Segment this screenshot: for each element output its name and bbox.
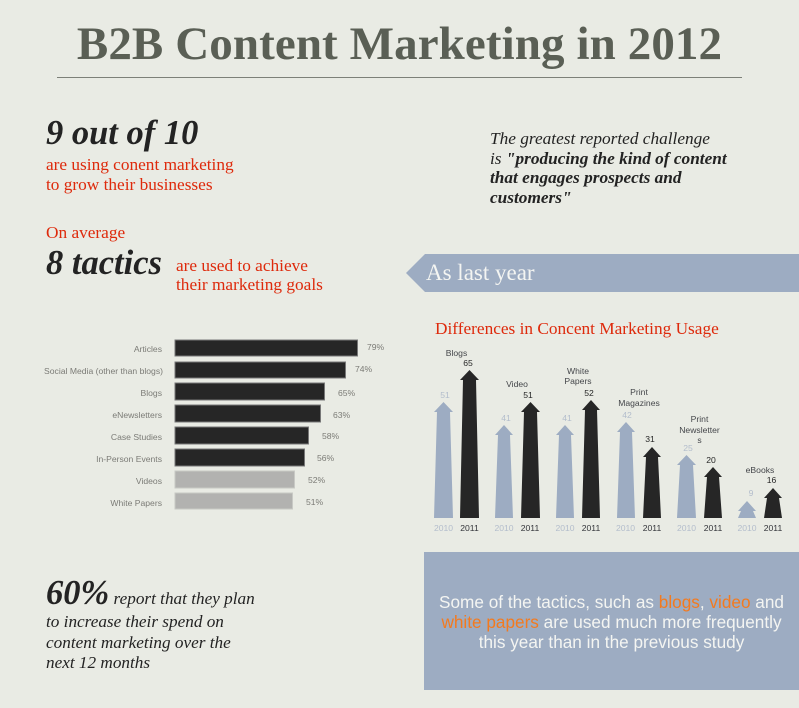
group: Blogs: 65 bbox=[463, 358, 473, 368]
group: Video: 2011 bbox=[521, 523, 539, 533]
bar: Case Studies bbox=[111, 427, 340, 444]
group: Print Newsletters: 2010 bbox=[677, 523, 696, 533]
bar: White Papers: White Papers bbox=[110, 498, 162, 508]
group: Print Magazines: 31 bbox=[645, 434, 655, 444]
callout text: this year than in the previous study bbox=[479, 632, 744, 652]
bar: eNewsletters: 63% bbox=[333, 410, 351, 420]
bar: Social Media: Social Media (other than blogs) bbox=[44, 366, 163, 376]
title: B2B Content Marketing in 2012 bbox=[77, 18, 722, 70]
group: White Papers: 52 bbox=[584, 388, 594, 398]
bar: Articles: Articles bbox=[134, 344, 162, 354]
bar: Articles bbox=[134, 340, 385, 356]
banner text: As last year bbox=[426, 260, 535, 285]
stat continuation: next 12 months bbox=[46, 653, 150, 672]
title underline bbox=[57, 77, 742, 78]
group: Print Newsletters: 20 bbox=[706, 455, 716, 465]
bar: Case Studies: 58% bbox=[322, 431, 340, 441]
group: Print Magazines: 2010 bbox=[616, 523, 635, 533]
callout text bbox=[439, 592, 784, 652]
group: Blogs: Blogs bbox=[446, 348, 467, 358]
group: Print Magazines: Magazines bbox=[618, 398, 660, 408]
group: Print Magazines bbox=[616, 387, 661, 533]
stat continuation: content marketing over the bbox=[46, 633, 231, 652]
stat continuation bbox=[46, 612, 231, 672]
group: eBooks: 9 bbox=[749, 488, 754, 498]
group: Print Newsletters: 25 bbox=[683, 443, 693, 453]
group: White Papers: 2010 bbox=[555, 523, 575, 533]
group: White Papers: 41 bbox=[562, 413, 572, 423]
group: Print Newsletters bbox=[677, 414, 722, 533]
group: eBooks bbox=[737, 465, 782, 533]
banner: as last year bbox=[406, 254, 799, 292]
group: White Papers bbox=[555, 366, 600, 533]
arrow chart: usage differences bbox=[434, 348, 782, 533]
group: Video bbox=[494, 379, 540, 533]
bar: Case Studies: Case Studies bbox=[111, 432, 162, 442]
quote: greatest challenge: that engages prospects and bbox=[490, 168, 682, 187]
tactics description: their marketing goals bbox=[176, 275, 323, 294]
stat: 9 out of 10 bbox=[46, 114, 234, 194]
bar: Videos bbox=[136, 471, 326, 488]
group: eBooks: 2010 bbox=[737, 523, 757, 533]
bar: Articles: 79% bbox=[367, 342, 385, 352]
bar: Social Media: 74% bbox=[355, 364, 373, 374]
tactics description: are used to achieve bbox=[176, 256, 308, 275]
bar: Blogs: 65% bbox=[338, 388, 356, 398]
group: Print Newsletters: s bbox=[697, 435, 702, 445]
callout text: white papers are used much more frequently bbox=[441, 612, 782, 632]
group: Blogs: 2011 bbox=[460, 523, 479, 533]
bar: Videos: 52% bbox=[308, 475, 326, 485]
on average: On average bbox=[46, 223, 125, 242]
quote: greatest challenge bbox=[490, 129, 728, 207]
bar: Social Media bbox=[44, 362, 373, 378]
group: White Papers: Papers bbox=[564, 376, 592, 386]
group: Blogs: 2010 bbox=[434, 523, 453, 533]
group: White Papers: White bbox=[567, 366, 589, 376]
stat number: 9 out of 10 bbox=[46, 114, 198, 152]
group: Video: Video bbox=[506, 379, 528, 389]
chart title: Differences in Concent Marketing Usage bbox=[435, 319, 719, 338]
bar: In-Person Events bbox=[96, 449, 335, 466]
stat description: to grow their businesses bbox=[46, 175, 213, 194]
bar: Blogs bbox=[140, 383, 356, 400]
quote: greatest challenge: The greatest reported challenge bbox=[490, 129, 710, 148]
bar: White Papers: 51% bbox=[306, 497, 324, 507]
bar chart: tactics bbox=[44, 340, 385, 510]
bar: Videos: Videos bbox=[136, 476, 162, 486]
bar: In-Person Events: In-Person Events bbox=[96, 454, 162, 464]
group: Print Newsletters: Print bbox=[691, 414, 709, 424]
group: White Papers: 2011 bbox=[582, 523, 600, 533]
bar: eNewsletters: eNewsletters bbox=[112, 410, 162, 420]
group: Video: 2010 bbox=[494, 523, 514, 533]
callout panel bbox=[424, 552, 799, 690]
bar: eNewsletters bbox=[112, 405, 351, 422]
banner shape bbox=[406, 254, 799, 292]
group: Blogs: 51 bbox=[440, 390, 450, 400]
stat description: are using conent marketing bbox=[46, 155, 234, 174]
group: Blogs bbox=[434, 348, 479, 533]
bar: White Papers bbox=[110, 493, 324, 509]
bar: In-Person Events: 56% bbox=[317, 453, 335, 463]
stat continuation: to increase their spend on bbox=[46, 612, 224, 631]
stat lead line: 60% report that they plan bbox=[46, 574, 255, 612]
quote: greatest challenge: is "producing the kind of content bbox=[490, 149, 727, 168]
callout text: Some of the tactics, such as blogs, video and bbox=[439, 592, 784, 612]
tactics description bbox=[176, 256, 323, 294]
tactics number: 8 tactics bbox=[46, 244, 162, 282]
group: Print Newsletters: 2011 bbox=[704, 523, 722, 533]
stat: 8 tactics bbox=[46, 223, 323, 294]
group: Print Magazines: Print bbox=[630, 387, 648, 397]
group: eBooks: 16 bbox=[767, 475, 776, 485]
bar: Blogs: Blogs bbox=[140, 388, 162, 398]
group: eBooks: eBooks bbox=[746, 465, 774, 475]
group: Print Magazines: 42 bbox=[622, 410, 632, 420]
group: Print Magazines: 2011 bbox=[643, 523, 661, 533]
group: Video: 51 bbox=[523, 390, 533, 400]
stat: 60% spend bbox=[46, 574, 255, 672]
group: Video: 41 bbox=[501, 413, 511, 423]
quote: greatest challenge: customers" bbox=[490, 188, 572, 207]
group: eBooks: 2011 bbox=[764, 523, 782, 533]
stat description bbox=[46, 155, 234, 194]
group: Print Newsletters: Newsletter bbox=[679, 425, 720, 435]
